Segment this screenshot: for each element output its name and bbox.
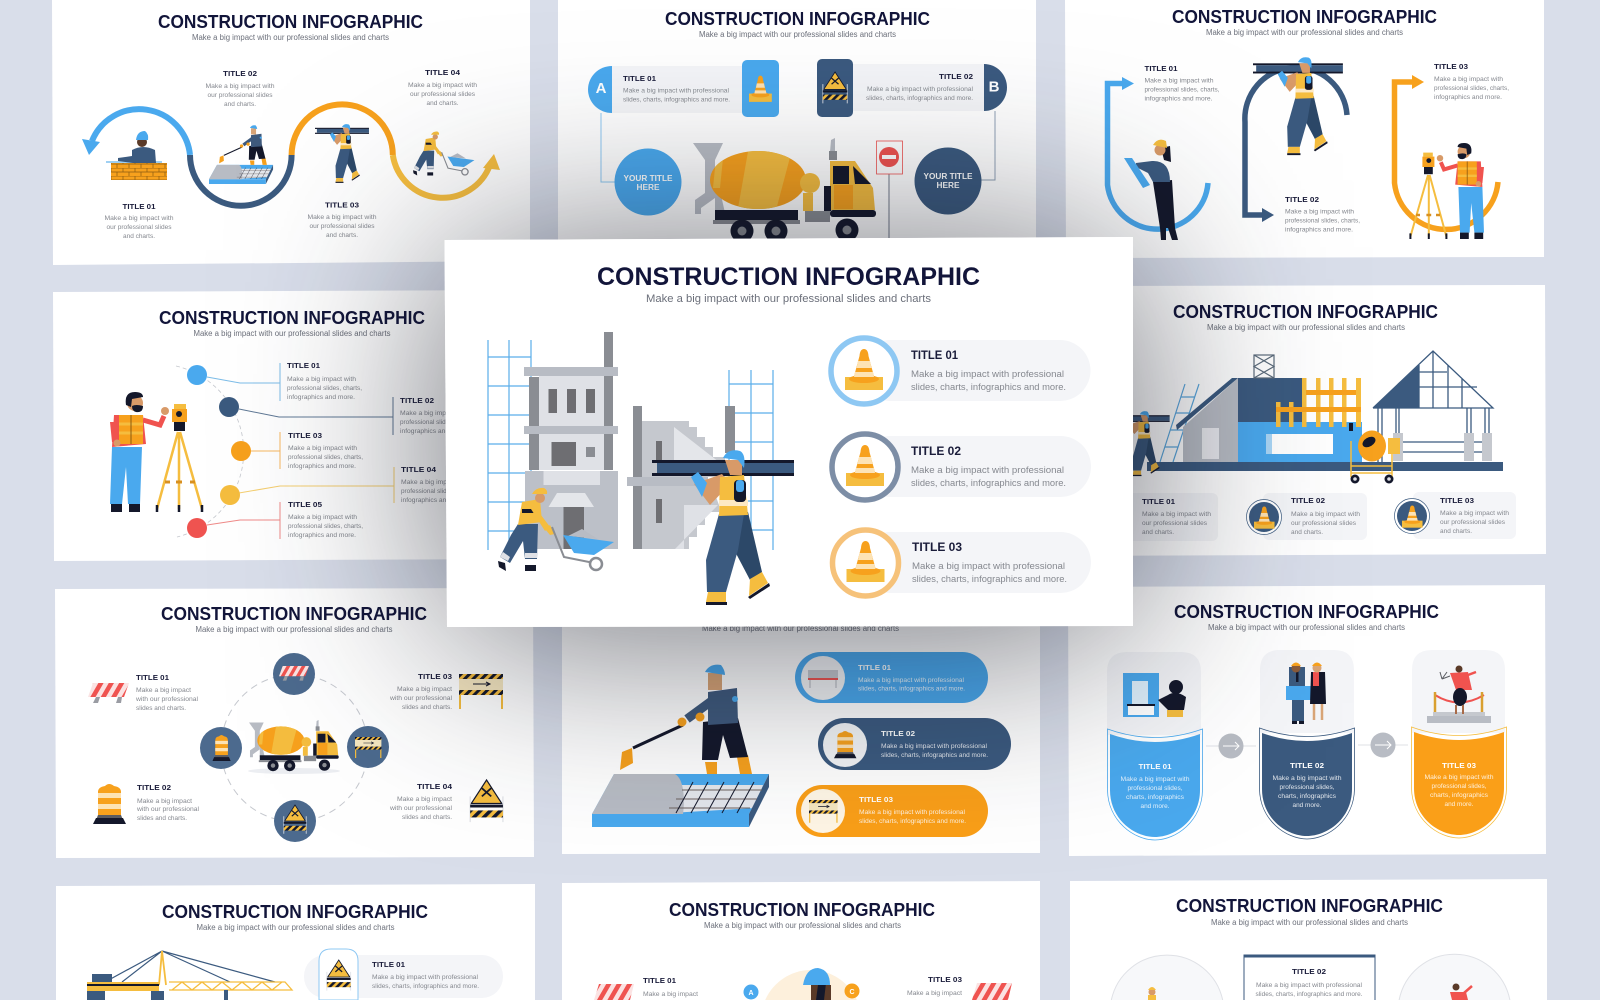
text: title 03: professional slides, charts, xyxy=(1434,85,1509,92)
heading xyxy=(1173,301,1438,332)
card: title 03: Make a big impact with xyxy=(1440,510,1510,517)
item: title 01 xyxy=(831,338,1090,404)
text: title 03: Make a big impact with xyxy=(1434,76,1504,83)
text: title 02: TITLE 02 xyxy=(1285,195,1319,204)
card: title 03: charts, infographics xyxy=(1430,792,1488,799)
item: title 01: TITLE 01 xyxy=(911,350,959,362)
text: title 03: Make a big impact with xyxy=(308,214,377,221)
heading xyxy=(1176,895,1443,927)
text: title 02: infographics and more. xyxy=(1285,226,1353,234)
card: title 03: Make a big impact with xyxy=(1424,774,1494,781)
illustration: central figure: A xyxy=(748,990,754,997)
text: title 02: TITLE 02 xyxy=(223,69,257,78)
item: title 01: TITLE 01 xyxy=(643,976,677,985)
card: title 02: our professional slides xyxy=(1291,520,1356,527)
text: title 04: and charts. xyxy=(426,100,459,107)
card: title 03: professional slides, xyxy=(1432,783,1487,790)
text: title 02: and charts. xyxy=(224,101,256,108)
item: title 03: TITLE 03 xyxy=(928,975,962,984)
card: title 01: Make a big impact with xyxy=(1142,511,1212,518)
text: title 01: infographics and more. xyxy=(1144,96,1213,102)
panel: slide concrete truck xyxy=(558,0,1036,242)
card: title 02: and more. xyxy=(1292,802,1322,809)
item: title 02: slides, charts, infographics and more. xyxy=(911,478,1066,488)
item: title 03 xyxy=(832,530,1091,596)
item: title 02 xyxy=(832,434,1091,500)
card: title 02 xyxy=(1244,955,1375,1000)
arch: right xyxy=(1399,954,1510,1000)
card: title 01: TITLE 01 xyxy=(1142,497,1176,506)
callout A: TITLE 01 xyxy=(623,74,657,83)
heading xyxy=(162,901,428,932)
item: title 02: Make a big impact xyxy=(137,798,192,805)
item: title 01: Make a big impact xyxy=(643,991,698,998)
item: title 03 xyxy=(907,975,1012,1000)
icon: hazard card xyxy=(817,59,853,117)
text: title 03: and charts. xyxy=(326,232,358,239)
panel: slide paver pills xyxy=(562,590,1040,854)
arrow: blue xyxy=(1108,77,1208,229)
figure: surveyor xyxy=(110,392,202,512)
timeline dots xyxy=(187,365,251,538)
figure: beam carrier xyxy=(1110,411,1170,476)
text: title 03: TITLE 03 xyxy=(288,431,322,440)
pill: title 02: slides, charts, infographics and more. xyxy=(881,752,988,759)
text: title 03: infographics and more. xyxy=(1434,94,1502,101)
heading: Make a big impact with our professional slides and charts xyxy=(1206,28,1403,37)
callout B xyxy=(853,64,1007,111)
card: title 01: charts, infographics xyxy=(1126,794,1184,801)
card: title 03 xyxy=(1394,492,1516,539)
text: title 04: Make a big impact with xyxy=(408,82,478,89)
text: title 01 xyxy=(104,202,174,240)
heading: Make a big impact with our professional slides and charts xyxy=(1208,623,1405,632)
item: title 01: TITLE 01 xyxy=(136,673,170,682)
pill: title 01: TITLE 01 xyxy=(858,663,892,672)
callout A: Make a big impact with professional xyxy=(623,88,729,94)
text: title 02: Make a big impact with xyxy=(1285,208,1355,216)
callout A xyxy=(588,66,743,113)
panel: slide abc figure xyxy=(562,881,1040,1000)
pill: title 03: Make a big impact with professional xyxy=(859,809,965,816)
card: title 02: Make a big impact with xyxy=(1291,511,1361,518)
illustration: left building xyxy=(524,332,618,549)
pill: title 02: TITLE 02 xyxy=(881,729,915,738)
illustration: mixer truck xyxy=(248,720,340,774)
heading: Make a big impact with our professional slides and charts xyxy=(196,625,392,634)
illustration: right building xyxy=(627,406,735,549)
item: title 01: with our professional xyxy=(135,696,198,703)
text: title 02 xyxy=(1285,195,1360,234)
card: title 01: our professional slides xyxy=(1142,520,1207,527)
figure: woman with blueprint xyxy=(1124,140,1178,240)
text: title 01: TITLE 01 xyxy=(1144,64,1178,73)
icon: barrier node xyxy=(273,653,315,695)
callout B: Make a big impact with professional xyxy=(867,86,973,93)
heading: Make a big impact with our professional slides and charts xyxy=(1207,323,1405,332)
heading: CONSTRUCTION INFOGRAPHIC xyxy=(162,901,428,922)
text: title 01: our professional slides xyxy=(106,224,172,231)
panel: slide arches xyxy=(1070,879,1547,1000)
figure: beam carrier xyxy=(1253,57,1343,155)
card: title 03: and more. xyxy=(1444,801,1474,808)
icon: hazard node xyxy=(274,800,316,842)
text: title 03: TITLE 03 xyxy=(325,200,359,210)
heading: CONSTRUCTION INFOGRAPHIC xyxy=(669,899,935,920)
illustration: cement mixer xyxy=(1349,423,1400,484)
heading xyxy=(665,8,930,39)
heading: CONSTRUCTION INFOGRAPHIC xyxy=(1174,601,1439,622)
text: title 05: professional slides, charts, xyxy=(288,523,363,530)
arrow: step 2 to 3 xyxy=(1358,732,1408,758)
item: title 01: slides and charts. xyxy=(136,705,186,712)
panel: main featured slide xyxy=(444,237,1133,627)
card: title 03 xyxy=(1412,650,1506,838)
pill: title 01: TITLE 01 xyxy=(372,960,406,969)
card: title 02: professional slides, xyxy=(1280,784,1335,791)
card: title 02: Make a big impact with xyxy=(1272,775,1342,782)
text: title 03: our professional slides xyxy=(310,223,374,230)
card: title 03: our professional slides xyxy=(1440,519,1505,526)
card: title 02: slides, charts, infographics and more. xyxy=(1256,991,1363,998)
item: title 04: with our professional xyxy=(389,805,452,812)
figure: paver xyxy=(209,125,273,184)
figure: wheelbarrow worker xyxy=(498,488,614,571)
heading xyxy=(1174,601,1439,632)
text: title 04: TITLE 04 xyxy=(401,465,437,474)
heading: CONSTRUCTION INFOGRAPHIC xyxy=(597,263,980,291)
item: title 02: TITLE 02 xyxy=(911,446,961,458)
heading: CONSTRUCTION INFOGRAPHIC xyxy=(1173,301,1438,322)
heading: Make a big impact with our professional slides and charts xyxy=(699,30,896,39)
heading: Make a big impact with our professional slides and charts xyxy=(704,921,901,930)
item: title 02 xyxy=(93,783,199,824)
text: title 04 xyxy=(401,465,476,504)
item: title 04: slides and charts. xyxy=(402,814,452,821)
text: title 01 xyxy=(287,361,362,401)
figure: wheelbarrow xyxy=(413,131,474,176)
callout A: slides, charts, infographics and more. xyxy=(623,96,730,104)
badge: your title blue xyxy=(614,148,682,216)
illustration: central figure xyxy=(744,968,860,1000)
panel: slide surveyor timeline xyxy=(53,290,540,561)
icon: drum node xyxy=(200,727,242,769)
figure: beam carrier xyxy=(652,450,794,605)
item: title 02: Make a big impact with professional xyxy=(911,465,1064,475)
callout B: B xyxy=(989,78,1000,96)
text: title 02: infographics and more. xyxy=(400,428,468,435)
subheading: Make a big impact with our professional slides and charts xyxy=(646,293,931,305)
pill: title 01: slides, charts, infographics and more. xyxy=(858,686,965,692)
item: title 03: slides and charts. xyxy=(402,704,452,711)
heading: Make a big impact with our professional slides and charts xyxy=(1211,918,1408,927)
text: title 01: professional slides, charts, xyxy=(1144,86,1220,94)
text: title 01: professional slides, charts, xyxy=(287,385,362,392)
heading xyxy=(1172,6,1437,37)
text: title 02: TITLE 02 xyxy=(400,396,434,405)
badge: your title blue: HERE xyxy=(636,183,660,192)
text: title 04: professional slides, charts, xyxy=(401,488,476,495)
heading: CONSTRUCTION INFOGRAPHIC xyxy=(668,594,932,615)
text: title 03: Make a big impact with xyxy=(288,445,358,452)
text: title 01: TITLE 01 xyxy=(287,361,321,370)
text: title 02: our professional slides xyxy=(208,92,272,99)
item: title 04: Make a big impact xyxy=(397,796,452,803)
figure: beam carrier xyxy=(315,124,369,183)
pill: title 02: Make a big impact with professional xyxy=(881,743,987,750)
heading xyxy=(668,594,932,633)
panel: slide U arrows xyxy=(1065,0,1544,258)
callout B: slides, charts, infographics and more. xyxy=(866,95,973,102)
item: title 03: Make a big impact xyxy=(907,990,962,997)
pill: title 03: slides, charts, infographics and more. xyxy=(859,818,966,825)
text: title 05: TITLE 05 xyxy=(288,500,323,509)
pill: title 01: slides, charts, infographics and more. xyxy=(372,983,479,990)
arch: left xyxy=(1111,955,1223,1000)
item: title 01: Make a big impact with professional xyxy=(911,369,1064,379)
text: title 01 xyxy=(1144,64,1220,102)
text: title 02 xyxy=(206,69,275,108)
card: title 01: professional slides, xyxy=(1128,785,1183,792)
panel: slide crane xyxy=(56,884,535,1000)
item: title 02: slides and charts. xyxy=(137,815,187,822)
heading xyxy=(161,603,427,634)
text: title 01: Make a big impact with xyxy=(104,215,174,222)
text: title 01: TITLE 01 xyxy=(122,202,156,211)
figure: paver xyxy=(592,665,769,827)
heading: CONSTRUCTION INFOGRAPHIC xyxy=(159,307,425,328)
text: title 01: Make a big impact with xyxy=(287,376,357,383)
card: title 03: TITLE 03 xyxy=(1440,496,1474,505)
badge: your title dark xyxy=(914,148,982,214)
card: title 01: and more. xyxy=(1140,803,1170,810)
panel: slide house xyxy=(1067,285,1546,556)
illustration: crane xyxy=(87,951,292,1000)
illustration: central figure: C xyxy=(849,989,855,996)
pill: title 02 xyxy=(818,718,1011,770)
card: title 02: Make a big impact with professional xyxy=(1256,982,1362,989)
panel: slide shields xyxy=(1068,585,1546,856)
item: title 01 xyxy=(88,673,198,712)
text: title 03: infographics and more. xyxy=(288,463,356,470)
text: title 03: professional slides, charts, xyxy=(288,454,363,461)
card: title 02: TITLE 02 xyxy=(1290,761,1324,770)
arrow: step 1 to 2 xyxy=(1206,734,1256,758)
item: title 01: slides, charts, infographics and more. xyxy=(911,382,1066,392)
item: title 03 xyxy=(389,672,503,711)
pill: title 01: Make a big impact with professional xyxy=(858,677,964,684)
text: title 05: Make a big impact with xyxy=(288,514,358,521)
callout B: TITLE 02 xyxy=(939,72,973,81)
heading: Make a big impact with our professional slides and charts xyxy=(192,33,389,42)
text: title 01: infographics and more. xyxy=(287,394,355,401)
pill: title 01 xyxy=(304,949,503,1000)
card: title 02: TITLE 02 xyxy=(1291,496,1325,505)
item: title 01 xyxy=(594,976,698,1000)
callout A: A xyxy=(596,80,607,97)
card: title 03: and charts. xyxy=(1440,528,1472,535)
heading: Make a big impact with our professional slides and charts xyxy=(194,329,390,338)
arrow: orange xyxy=(1394,75,1498,229)
item: title 03: with our professional xyxy=(389,695,452,702)
illustration: scaffold right xyxy=(729,370,773,550)
card: title 02: and charts. xyxy=(1291,529,1323,536)
text: title 04 xyxy=(408,68,478,107)
arrow: dark xyxy=(1245,67,1347,222)
badge: your title dark: HERE xyxy=(936,181,960,190)
icon: stop sign xyxy=(876,141,902,240)
heading: CONSTRUCTION INFOGRAPHIC xyxy=(1172,6,1437,27)
text: title 04: infographics and more. xyxy=(401,497,469,504)
item: title 04 xyxy=(389,780,503,822)
heading: CONSTRUCTION INFOGRAPHIC xyxy=(158,11,423,32)
heading: Make a big impact with our professional slides and charts xyxy=(702,624,899,633)
item: title 02: with our professional xyxy=(136,806,199,813)
card: title 02: TITLE 02 xyxy=(1292,967,1326,976)
text: title 04: Make a big impact with xyxy=(401,479,471,486)
text: title 02: professional slides, charts, xyxy=(400,419,475,426)
card: title 02 xyxy=(1260,650,1354,839)
text: title 01: Make a big impact with xyxy=(1144,78,1214,84)
heading xyxy=(159,307,425,338)
text: title 03 xyxy=(308,200,377,239)
card: title 01: TITLE 01 xyxy=(1138,762,1172,771)
text: title 02: Make a big impact with xyxy=(206,83,275,90)
illustration: house under construction xyxy=(1147,351,1503,471)
heading xyxy=(669,899,935,930)
text: title 03 xyxy=(288,431,363,470)
heading: CONSTRUCTION INFOGRAPHIC xyxy=(665,8,930,29)
text: title 04: our professional slides xyxy=(410,91,475,98)
item: title 04: TITLE 04 xyxy=(417,782,453,791)
card: title 03: TITLE 03 xyxy=(1442,761,1476,770)
text: title 05 xyxy=(288,500,363,539)
illustration: mixer truck xyxy=(693,138,876,242)
card: title 01: and charts. xyxy=(1142,529,1174,536)
pill: title 01 xyxy=(795,652,988,703)
icon: arrow barrier node xyxy=(347,726,389,768)
heading: CONSTRUCTION INFOGRAPHIC xyxy=(161,603,427,624)
text: title 03 xyxy=(1434,62,1509,101)
heading: Make a big impact with our professional slides and charts xyxy=(196,923,394,932)
text: title 02: professional slides, charts, xyxy=(1285,218,1360,224)
pill: title 01: Make a big impact with professional xyxy=(372,974,478,981)
item: title 03: TITLE 03 xyxy=(912,542,962,554)
item: title 03: TITLE 03 xyxy=(418,672,452,681)
text: title 03: TITLE 03 xyxy=(1434,62,1468,71)
card: title 02: charts, infographics xyxy=(1278,793,1336,800)
text: title 02: Make a big impact with xyxy=(400,410,470,417)
card: title 01 xyxy=(1107,652,1202,840)
item: title 02: TITLE 02 xyxy=(137,783,171,792)
card: title 02 xyxy=(1246,493,1367,540)
badge: your title blue: YOUR TITLE xyxy=(624,174,672,183)
heading: CONSTRUCTION INFOGRAPHIC xyxy=(1176,895,1443,916)
text: title 05: infographics and more. xyxy=(288,532,356,539)
card: title 01 xyxy=(1120,493,1218,541)
item: title 03: Make a big impact xyxy=(397,686,452,693)
illustration: scaffold left xyxy=(488,340,531,550)
item: title 03: slides, charts, infographics and more. xyxy=(912,574,1067,584)
panel: slide S-curve steps xyxy=(52,0,530,265)
figure: bricklayer xyxy=(106,131,167,180)
item: title 03: Make a big impact with professional xyxy=(912,561,1065,571)
text: title 04: TITLE 04 xyxy=(425,68,461,77)
figure: surveyor xyxy=(1410,143,1484,239)
chart: S-curve arrow xyxy=(82,104,500,206)
badge: your title dark: YOUR TITLE xyxy=(924,172,972,181)
panel: slide cycle with truck xyxy=(55,588,534,858)
heading xyxy=(158,11,423,42)
text: title 01: and charts. xyxy=(123,233,155,240)
pill: title 03: TITLE 03 xyxy=(859,795,893,804)
item: title 01: Make a big impact xyxy=(136,687,191,694)
pill: title 03 xyxy=(796,785,988,837)
card: title 01: Make a big impact with xyxy=(1120,776,1190,783)
icon: cone card xyxy=(742,60,779,117)
text: title 02 xyxy=(400,396,475,435)
